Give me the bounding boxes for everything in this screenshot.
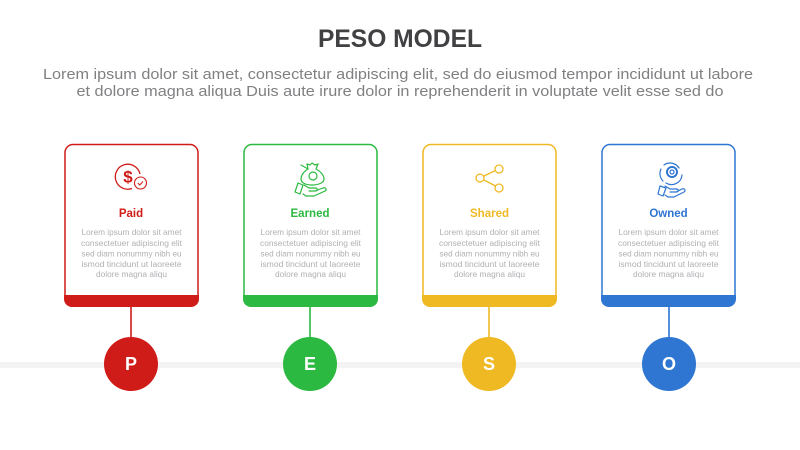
body text: Paid: sed diam nonummy nibh eu xyxy=(82,248,182,258)
body text: Owned xyxy=(618,227,720,279)
card footer bar xyxy=(243,295,378,307)
body text: Paid xyxy=(81,227,183,279)
icon: share nodes xyxy=(476,165,503,192)
title: PESO MODEL xyxy=(318,25,482,53)
body text: Earned xyxy=(260,227,362,279)
subtitle text: et dolore magna aliqua Duis aute irure dolor in reprehenderit in voluptate velit esse sed do xyxy=(76,83,724,100)
body text: Earned: consectetuer adipiscing elit xyxy=(260,238,362,248)
body text: Paid: Lorem ipsum dolor sit amet xyxy=(82,227,182,237)
card footer bar xyxy=(422,295,557,307)
body text: Paid: ismod tincidunt ut laoreete xyxy=(82,259,182,269)
marker: P xyxy=(104,337,158,391)
body text: Owned: dolore magna aliqu xyxy=(633,269,704,279)
body text: Shared: consectetuer adipiscing elit xyxy=(439,238,541,248)
heading: Owned: Owned xyxy=(649,208,688,220)
body text: Owned: ismod tincidunt ut laoreete xyxy=(618,259,719,269)
body text: Earned: sed diam nonummy nibh eu xyxy=(260,248,361,258)
icon: dollar coin with check: $ xyxy=(123,168,133,186)
card outline xyxy=(244,144,377,306)
card footer bar xyxy=(64,295,199,307)
body text: Shared: sed diam nonummy nibh eu xyxy=(440,248,540,258)
icon: gear on hand xyxy=(658,163,685,197)
connector: Owned xyxy=(668,306,670,339)
card footer bar xyxy=(601,295,736,307)
body text: Owned: sed diam nonummy nibh eu xyxy=(618,248,719,258)
icon: money bag on hand xyxy=(295,163,326,196)
panel: Paid xyxy=(64,144,199,307)
icon: dollar coin with check xyxy=(115,164,146,189)
body text: Paid: dolore magna aliqu xyxy=(96,269,167,279)
body text: Shared: dolore magna aliqu xyxy=(454,269,525,279)
card outline xyxy=(65,144,198,306)
body text: Earned: dolore magna aliqu xyxy=(275,269,346,279)
subtitle text xyxy=(43,66,753,100)
body text: Paid: consectetuer adipiscing elit xyxy=(81,238,183,248)
heading: Shared: Shared xyxy=(470,208,509,220)
marker: S: S xyxy=(483,354,495,374)
marker: P: P xyxy=(125,354,137,374)
heading: Paid: Paid xyxy=(119,208,143,220)
body text: Shared xyxy=(439,227,541,279)
card outline xyxy=(602,144,735,306)
body text: Owned: consectetuer adipiscing elit xyxy=(618,238,720,248)
connector: Shared xyxy=(488,306,490,339)
marker: O: O xyxy=(662,354,676,374)
subtitle text: Lorem ipsum dolor sit amet, consectetur adipiscing elit, sed do eiusmod tempor incididunt ut labore xyxy=(43,66,753,83)
timeline track xyxy=(0,362,800,368)
body text: Earned: Lorem ipsum dolor sit amet xyxy=(260,227,361,237)
marker: E xyxy=(283,337,337,391)
connector: Earned xyxy=(309,306,311,339)
marker: O xyxy=(642,337,696,391)
panel: Owned xyxy=(601,144,736,307)
panel: Shared xyxy=(422,144,557,307)
body text: Shared: ismod tincidunt ut laoreete xyxy=(440,259,540,269)
panel: Earned xyxy=(243,144,378,307)
card outline xyxy=(423,144,556,306)
marker: S xyxy=(462,337,516,391)
body text: Shared: Lorem ipsum dolor sit amet xyxy=(440,227,540,237)
body text: Owned: Lorem ipsum dolor sit amet xyxy=(618,227,719,237)
heading: Earned: Earned xyxy=(290,208,330,220)
connector: Paid xyxy=(130,306,132,339)
body text: Earned: ismod tincidunt ut laoreete xyxy=(260,259,361,269)
marker: E: E xyxy=(304,354,316,374)
